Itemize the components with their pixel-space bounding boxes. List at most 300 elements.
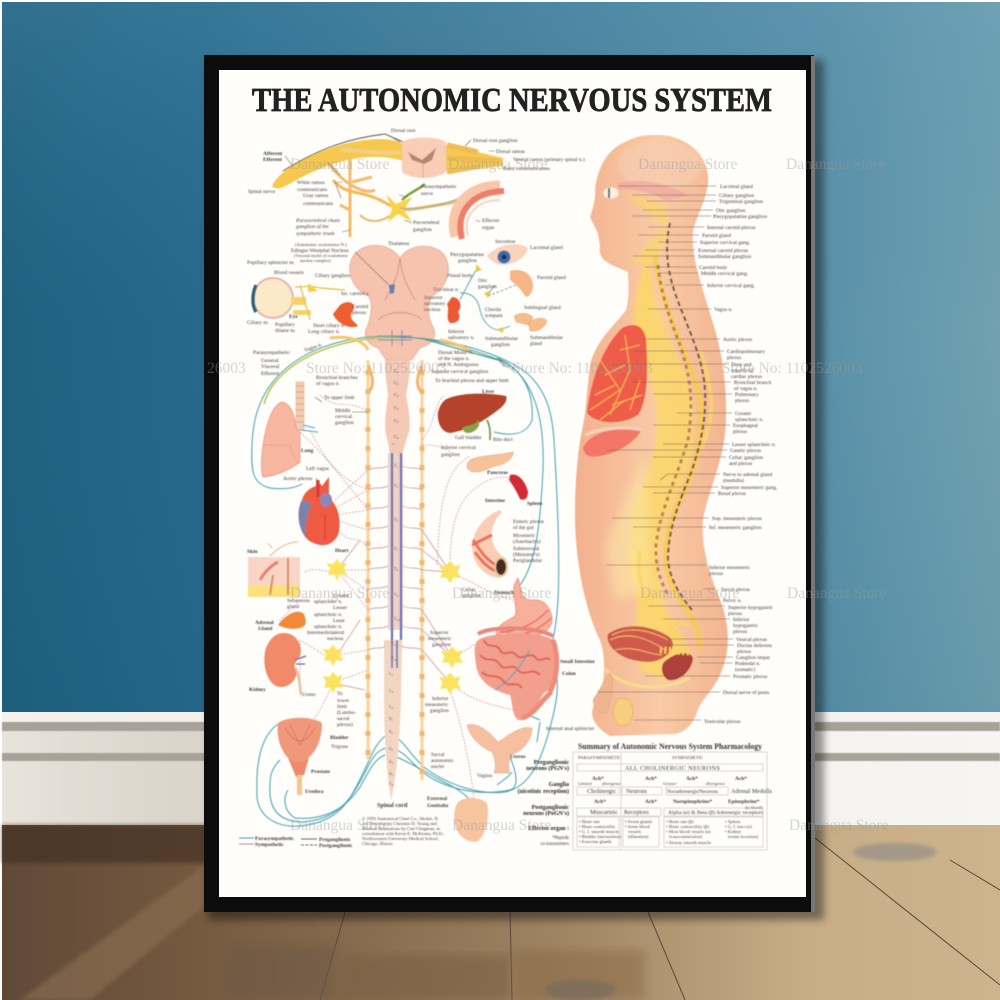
labels: organs: Celiac bbox=[462, 587, 476, 593]
torso labels: Ductus deferens bbox=[737, 642, 772, 649]
store watermarks: Danangua Store bbox=[787, 585, 887, 602]
spinal cord and chains: T₁₂ bbox=[391, 656, 397, 661]
labels: upper diagrams: (Visceral nuclei of oculomotor bbox=[294, 253, 348, 258]
spinal cord and chains: L₁ bbox=[389, 671, 394, 676]
torso labels: Dorsal nerve of penis bbox=[723, 689, 769, 696]
external genitalia bbox=[454, 798, 488, 842]
torso labels: plexus bbox=[733, 629, 747, 635]
labels: upper diagrams: Lacrimal gland bbox=[530, 245, 563, 251]
labels: upper diagrams: Ciliary m. bbox=[247, 320, 269, 326]
torso labels: plexus bbox=[728, 611, 742, 617]
labels: organs: Chicago, Illinois bbox=[362, 841, 393, 847]
labels: organs: mesenteric bbox=[428, 636, 452, 642]
store watermarks bbox=[207, 156, 889, 834]
labels: organs: Vagina bbox=[477, 773, 493, 779]
table row labels: (nicotinic reception) bbox=[518, 788, 569, 795]
labels: organs: To upper limb bbox=[324, 395, 355, 401]
labels: upper diagrams: of the vagus n. bbox=[438, 355, 470, 362]
torso labels: plexus bbox=[709, 571, 723, 577]
labels: organs: Art Direction by Christine D. Young and bbox=[362, 821, 437, 826]
store watermarks: Danangua Store bbox=[786, 156, 886, 173]
spinal cord and chains: C₄ bbox=[394, 405, 399, 410]
table text: • Bladder (micturition) bbox=[579, 834, 621, 839]
table text bbox=[577, 755, 772, 845]
labels: organs: Submucosal bbox=[513, 546, 540, 552]
table text: Neurons bbox=[699, 789, 718, 795]
table text: Greater bbox=[663, 781, 677, 786]
labels: organs: (Meissner's) bbox=[513, 551, 540, 558]
labels: upper diagrams bbox=[247, 128, 585, 384]
labels: upper diagrams: gland bbox=[530, 341, 542, 347]
spinal cord and chains: S₃ bbox=[389, 746, 394, 751]
torso labels: (medulla) bbox=[723, 477, 744, 484]
lung bbox=[262, 382, 318, 477]
labels: organs: Pancreas bbox=[487, 470, 508, 476]
labels: organs: Internal anal sphincter bbox=[546, 726, 594, 732]
table text: Alpha (α) & Beta (β) Adrenergic receptors bbox=[668, 809, 763, 816]
table text: • G. I. smooth muscle bbox=[579, 829, 619, 834]
labels: upper diagrams: Superior bbox=[424, 295, 443, 301]
heart and lung red bbox=[587, 325, 647, 422]
labels: upper diagrams: Dorsal root bbox=[391, 128, 416, 134]
torso labels: Testicular plexus bbox=[704, 719, 741, 725]
labels: organs: Small Intestine bbox=[560, 659, 595, 665]
labels: upper diagrams: Short ciliary n. bbox=[313, 323, 345, 329]
labels: organs: Intestine bbox=[485, 498, 506, 504]
labels: upper diagrams: plexus bbox=[352, 310, 366, 316]
labels: upper diagrams: Sublingual gland bbox=[524, 305, 561, 311]
torso labels: Cardiopulmonary bbox=[727, 349, 765, 355]
labels: upper diagrams: Submandibular bbox=[530, 335, 563, 341]
labels: upper diagrams: Pterygopalatine bbox=[450, 252, 484, 258]
torso labels: Ganglion impar bbox=[736, 655, 770, 661]
labels: upper diagrams: Dorsal Motor N. bbox=[438, 350, 474, 356]
spinal cord and chains: T₁ bbox=[394, 463, 399, 468]
torso labels: Ciliary ganglion bbox=[719, 193, 754, 199]
labels: organs: plexus) bbox=[337, 721, 353, 728]
labels: upper diagrams: Visceral bbox=[261, 364, 280, 370]
labels: organs: autonomic bbox=[431, 758, 454, 764]
labels: organs: Adrenal bbox=[255, 620, 274, 626]
labels: upper diagrams: White ramus bbox=[297, 180, 325, 186]
spine dark bbox=[667, 223, 705, 610]
labels: upper diagrams: Spinal nerve bbox=[248, 189, 276, 195]
labels: organs: Northwestern University Medical School, bbox=[362, 836, 439, 842]
labels: organs: Greater bbox=[333, 593, 349, 599]
store watermarks: Danangua Store bbox=[640, 585, 740, 602]
labels: organs: Genitalia bbox=[427, 803, 449, 809]
labels: organs: Lesser bbox=[333, 605, 347, 611]
labels: upper diagrams: Secretion bbox=[495, 239, 516, 245]
spinal cord and chains: L₃ bbox=[389, 704, 394, 709]
labels: upper diagrams: Pupillary bbox=[275, 322, 295, 328]
labels: organs: lower bbox=[337, 698, 349, 704]
table text: PARASYMPATHETIC bbox=[578, 755, 621, 760]
labels: upper diagrams: Parasympathetic bbox=[421, 184, 457, 190]
labels: upper diagrams: Dorsal ramus bbox=[496, 149, 525, 155]
spinal nerve diagram bbox=[272, 134, 504, 239]
store watermarks: 26003 bbox=[207, 360, 246, 377]
torso labels: Pudendal n. bbox=[735, 661, 760, 667]
adrenal gland bbox=[278, 612, 306, 629]
labels: organs: Sebaceous bbox=[287, 598, 310, 604]
spinal cord and chains: T₁₀ bbox=[394, 616, 400, 621]
labels: upper diagrams: Ciliary ganglion bbox=[315, 273, 350, 279]
store watermarks: Danangua Store bbox=[290, 817, 390, 834]
torso labels: Superior hypogastric bbox=[728, 605, 774, 611]
spinal cord and chains: T₉ bbox=[394, 592, 399, 597]
torso labels: Vesical plexus bbox=[736, 637, 767, 643]
torso labels: Parotid gland bbox=[702, 233, 731, 239]
pelvic parasympathetic nerves bbox=[257, 647, 557, 826]
torso leader lines bbox=[598, 186, 734, 720]
table text: Ach* bbox=[592, 776, 604, 782]
torso labels: Aortic plexus bbox=[723, 337, 752, 343]
labels: upper diagrams: Pineal body bbox=[447, 273, 473, 279]
labels: organs: Superior bbox=[430, 630, 449, 636]
table text: Cholinergic bbox=[587, 788, 616, 795]
spinal cord and chains: S₂ bbox=[389, 729, 394, 734]
torso labels: Sup. mesenteric plexus bbox=[712, 516, 762, 522]
table text: Noradrenergic bbox=[667, 789, 700, 795]
labels: organs: Medical Illustrations by Carl Clingman, in bbox=[362, 826, 441, 832]
spinal cord and chains: C₁ bbox=[394, 368, 399, 373]
table row labels: neurons (PoGN's) bbox=[523, 810, 569, 817]
labels: organs: Colon bbox=[562, 671, 576, 677]
store watermarks: Danangua Store bbox=[452, 585, 552, 602]
torso labels: Inf. mesenteric ganglion bbox=[709, 524, 762, 531]
head nerve yellow bbox=[625, 192, 668, 264]
torso labels: Pterygopalatine ganglion bbox=[713, 214, 767, 220]
labels: upper diagrams: Submandibular bbox=[485, 336, 518, 342]
labels: upper diagrams: nerve bbox=[421, 191, 434, 197]
table text: SYMPATHETIC bbox=[672, 755, 703, 760]
torso labels: Vagus n. bbox=[714, 307, 733, 313]
spinal cord and chains: T₈ bbox=[394, 566, 399, 571]
table text: Limited bbox=[577, 781, 592, 786]
torso labels: Lacrimal gland bbox=[720, 184, 753, 190]
labels: organs: Lung bbox=[301, 448, 314, 454]
store watermarks: Danangua Store bbox=[638, 156, 738, 173]
spinal cord and chains: S₄ bbox=[389, 759, 394, 764]
labels: organs: nucleus bbox=[327, 636, 343, 642]
labels: organs: (Lumbo- bbox=[337, 709, 356, 716]
table text: Adrenal Medulla bbox=[731, 789, 772, 795]
labels: upper diagrams: Vagus n. bbox=[497, 359, 516, 373]
labels: upper diagrams: sympathetic trunk bbox=[296, 231, 335, 237]
labels: upper diagrams: Int. carotid a. bbox=[341, 291, 370, 297]
table text: • Exocrine glands bbox=[579, 839, 612, 844]
spinal cord and chains: L₂ bbox=[389, 688, 394, 693]
labels: organs: External bbox=[427, 796, 448, 802]
pancreas bbox=[467, 452, 513, 472]
labels: organs: ganglion bbox=[441, 452, 460, 458]
table text: ALL CHOLINERGIC NEURONS bbox=[625, 765, 720, 772]
table row labels bbox=[518, 760, 569, 847]
torso labels: (somatic) bbox=[735, 666, 756, 673]
labels: organs: ganglion bbox=[432, 642, 451, 648]
liver bbox=[438, 394, 507, 440]
table text: • Some blood bbox=[625, 824, 651, 829]
torso labels: Trigeminal ganglion bbox=[719, 199, 763, 205]
labels: upper diagrams: communicans bbox=[303, 201, 333, 207]
labels: upper diagrams: dilator m. bbox=[275, 328, 296, 334]
labels: organs: Periglandular bbox=[513, 558, 542, 564]
labels: organs: Middle bbox=[335, 408, 351, 414]
spinal cord and chains: T₅ bbox=[394, 517, 399, 522]
prevertebral ganglion bbox=[386, 194, 412, 222]
labels: upper diagrams: nuclear complex) bbox=[300, 258, 331, 263]
torso labels: Bronchial branch bbox=[734, 380, 772, 386]
labels: upper diagrams: Blood vessels bbox=[274, 270, 304, 276]
table text: Ach* bbox=[594, 799, 606, 805]
labels: organs: Kidney bbox=[249, 687, 266, 693]
labels: upper diagrams: Efferent bbox=[263, 157, 282, 163]
labels: organs: Spinal cord bbox=[377, 802, 408, 809]
labels: organs: ganglion bbox=[462, 593, 481, 599]
labels: upper diagrams: To brachial plexus and upper limb bbox=[435, 378, 509, 384]
table text: Ach* bbox=[735, 776, 747, 782]
table text: divergence bbox=[706, 781, 725, 786]
table text: Ach* bbox=[645, 776, 657, 782]
labels: upper diagrams: salivatory n. bbox=[448, 335, 475, 341]
torso labels: Superior cervical gang. bbox=[700, 240, 750, 246]
torso labels: Carotid body bbox=[699, 265, 728, 271]
table text: • Most blood vessels (α) bbox=[666, 829, 711, 834]
title: THE AUTONOMIC NERVOUS SYSTEM bbox=[252, 82, 772, 119]
spinal cord and chains: S₁ bbox=[389, 716, 394, 721]
labels: upper diagrams: Thalamus bbox=[388, 241, 409, 247]
labels: upper diagrams: nucleus bbox=[424, 307, 440, 313]
labels: organs: (Auerbach's) bbox=[513, 538, 541, 545]
labels: organs: Stomach bbox=[494, 590, 514, 596]
labels: organs: Uterus bbox=[510, 754, 526, 760]
labels: organs: Least bbox=[333, 618, 345, 624]
labels: upper diagrams: Afferent bbox=[263, 151, 283, 157]
torso labels: Pelvic n. bbox=[723, 598, 742, 604]
intestine wall bbox=[472, 510, 507, 578]
spinal cord and chains: C₀ bbox=[389, 781, 394, 786]
store watermarks: Danangua Store bbox=[290, 585, 390, 602]
table row labels: neurons (PGN's) bbox=[526, 765, 569, 772]
table row labels: Postganglionic bbox=[532, 805, 569, 811]
table text: • Airway smooth muscle bbox=[666, 840, 711, 845]
labels: organs: Left vagus bbox=[306, 465, 329, 472]
labels: upper diagrams: Edinger-Westphal Nucleus bbox=[291, 248, 349, 254]
torso labels: cardiac plexus bbox=[731, 374, 762, 380]
vagus nerves bbox=[252, 336, 559, 660]
spinal cord and chains: C₅ bbox=[394, 418, 399, 423]
eye bbox=[253, 278, 345, 320]
torso anatomical figure bbox=[575, 135, 728, 736]
table text: Ach* bbox=[686, 776, 698, 782]
labels: organs bbox=[247, 375, 595, 847]
table text: • Heart rate (β) bbox=[666, 819, 694, 824]
labels: organs: gland bbox=[287, 604, 299, 610]
table text: Receptors bbox=[624, 809, 649, 816]
labels: organs: nuclei bbox=[431, 764, 445, 770]
torso labels: Nerve to adrenal gland bbox=[723, 472, 773, 478]
torso labels: Lesser splanchnic n. bbox=[732, 442, 776, 448]
legend: Sympathetic bbox=[255, 842, 284, 848]
table text: Muscarinic bbox=[590, 809, 618, 816]
labels: organs: Heart bbox=[335, 548, 349, 554]
torso labels: Gastric plexus bbox=[730, 448, 761, 454]
skin bbox=[248, 542, 300, 597]
torso labels: Middle cervical gang. bbox=[701, 271, 748, 277]
table text: • Heart rate bbox=[579, 819, 600, 824]
poster frame bbox=[204, 55, 824, 920]
labels: upper diagrams: Long ciliary n. bbox=[308, 329, 340, 335]
labels: organs: Sacral bbox=[431, 752, 445, 758]
kidney bbox=[264, 633, 306, 695]
legend: Preganglionic bbox=[319, 837, 351, 843]
torso labels: hypogastric bbox=[733, 623, 759, 629]
labels: upper diagrams: Rami communicantes bbox=[503, 166, 550, 172]
labels: organs: splanchnic n. bbox=[314, 612, 342, 618]
spinal cord and chains: C₃ bbox=[394, 392, 399, 397]
torso labels: Renal plexus bbox=[718, 491, 746, 497]
labels: upper diagrams: Pupillary sphincter m. bbox=[247, 260, 295, 266]
torso labels: splanchnic n. bbox=[735, 417, 763, 423]
store watermarks: Danangua Store bbox=[789, 817, 889, 834]
labels: organs: Gall bladder bbox=[455, 435, 482, 441]
intestines bbox=[475, 628, 557, 720]
carotid plexus left bbox=[333, 302, 358, 327]
table text: Norepinephrine* bbox=[673, 799, 712, 805]
table text: • Heart contractility bbox=[579, 824, 616, 829]
torso labels: Celiac ganglion bbox=[729, 455, 763, 461]
labels: organs: ganglion bbox=[335, 420, 354, 426]
labels: organs: Bronchial branches bbox=[316, 375, 358, 381]
labels: upper diagrams: Gray ramus bbox=[303, 193, 328, 199]
table text: vessels bbox=[628, 829, 641, 834]
table text: divergence bbox=[602, 781, 621, 786]
labels: organs: Inferior bbox=[432, 695, 449, 702]
labels: upper diagrams: salivatory bbox=[424, 301, 446, 307]
store watermarks: Danangua Store bbox=[448, 156, 548, 173]
spinal cord cross-section bbox=[402, 138, 446, 178]
labels: organs: Intermediolateral bbox=[307, 630, 345, 636]
labels: organs: Myenteric bbox=[513, 533, 536, 539]
table text: Epinephrine* bbox=[728, 799, 760, 805]
spinal cord and chains bbox=[368, 360, 422, 800]
store watermarks: Danangua Store bbox=[452, 817, 552, 834]
labels: upper diagrams: Effector bbox=[482, 217, 500, 224]
torso labels: Inferior cervical gang. bbox=[707, 282, 755, 289]
spinal cord and chains: T₃ bbox=[394, 483, 399, 488]
labels: upper diagrams: tympani bbox=[485, 313, 503, 319]
labels: upper diagrams: Carotid bbox=[352, 304, 368, 310]
spinal cord and chains: T₇ bbox=[394, 546, 399, 551]
table text: Ach* bbox=[645, 799, 657, 805]
table title: Summary of Autonomic Nervous System Pharmacology bbox=[578, 741, 763, 751]
labels: organs: Urethra bbox=[305, 789, 324, 795]
pharmacology table bbox=[518, 741, 772, 850]
table text: • Sweat glands bbox=[625, 819, 652, 824]
table text: • G. I. tract (α) bbox=[725, 824, 752, 829]
torso labels: of vagus n. bbox=[734, 385, 758, 392]
table text: • Heart contractility (β) bbox=[666, 824, 709, 829]
labels: upper diagrams: General bbox=[261, 358, 279, 364]
labels: upper diagrams: Efferent bbox=[261, 370, 280, 377]
brain and brainstem bbox=[350, 245, 448, 360]
ganglia bbox=[322, 559, 463, 694]
torso labels: and plexus bbox=[729, 461, 752, 467]
torso labels: Deep and bbox=[731, 362, 752, 368]
labels: upper diagrams: Trochlear n. bbox=[433, 287, 459, 293]
sympathetic trunks bbox=[368, 360, 422, 780]
legend bbox=[239, 836, 353, 849]
sympathetic chain bbox=[330, 157, 375, 237]
labels: upper diagrams: ganglion bbox=[458, 258, 477, 264]
carotid plexus right bbox=[447, 297, 460, 323]
torso labels: Esophageal bbox=[733, 423, 758, 429]
legend: Parasympathetic bbox=[255, 836, 295, 842]
torso labels: Prostatic plexus bbox=[733, 674, 767, 680]
table boxes bbox=[573, 752, 767, 850]
eye of torso bbox=[603, 187, 619, 199]
labels: upper diagrams: Parasympathetic bbox=[253, 350, 290, 356]
legend: Postganglionic bbox=[319, 843, 353, 849]
store watermarks: Store No: 1102526003 bbox=[306, 360, 447, 377]
labels: upper diagrams: Vagus n. bbox=[304, 342, 323, 354]
labels: organs: mesenteric bbox=[425, 702, 449, 708]
labels: organs: © 1993 Anatomical Chart Co., Skokie, IL bbox=[362, 816, 439, 822]
spinal cord and chains: C₂ bbox=[394, 380, 399, 385]
labels: organs: limb bbox=[337, 704, 347, 710]
torso labels: plexus bbox=[735, 398, 749, 404]
labels: organs: splanchnic n. bbox=[314, 624, 342, 630]
labels: organs: consultation with Kevin E. McKenna, Ph.D., bbox=[362, 831, 444, 837]
table row labels: Ganglia bbox=[549, 782, 569, 788]
torso labels: Greater bbox=[735, 411, 751, 417]
torso labels: plexus bbox=[727, 355, 741, 361]
labels: upper diagrams: Chorda bbox=[485, 307, 501, 313]
table text: (dilatation) bbox=[628, 834, 649, 839]
torso labels: Otic ganglion bbox=[716, 208, 746, 214]
labels: organs: Inferior cervical bbox=[441, 444, 476, 451]
labels: organs: ganglion bbox=[430, 708, 449, 714]
store watermarks: Store No: 1102526003 bbox=[722, 360, 863, 377]
table text: (to blood) bbox=[745, 805, 763, 810]
labels: upper diagrams: Inferior bbox=[448, 328, 465, 335]
labels: upper diagrams: and N. Ambiguous bbox=[438, 362, 479, 368]
stomach bbox=[496, 578, 552, 637]
labels: organs: Aortic plexus bbox=[283, 476, 312, 482]
torso labels: plexus bbox=[737, 649, 751, 655]
bladder and prostate bbox=[278, 718, 322, 795]
table text: (renin secretion) bbox=[728, 834, 759, 839]
labels: organs: cervical bbox=[335, 414, 353, 420]
torso labels: superficial bbox=[731, 367, 754, 374]
labels: organs: Ureter bbox=[302, 692, 316, 698]
table text: (vasoconstriction) bbox=[669, 834, 703, 839]
labels: organs: Enteric plexus bbox=[513, 519, 544, 525]
labels: organs: Bile duct bbox=[493, 437, 513, 443]
labels: organs: Skin bbox=[247, 549, 258, 555]
torso labels: Pulmonary bbox=[735, 392, 759, 398]
spinal cord and chains: T₁₁ bbox=[391, 641, 397, 646]
labels: upper diagrams: (Autonomic oculomotor N.) bbox=[295, 242, 347, 247]
labels: upper diagrams: Paravertebral chain bbox=[295, 218, 340, 224]
labels: upper diagrams: Superior cervical ganglion bbox=[431, 369, 488, 375]
torso labels: Submandibular ganglion bbox=[698, 254, 751, 260]
labels: upper diagrams: Dorsal root ganglion bbox=[473, 138, 518, 144]
torso labels: Superior mesenteric gang. bbox=[721, 485, 777, 491]
table row labels: *Peptide bbox=[552, 836, 569, 841]
labels: organs: of vagus n. bbox=[316, 380, 340, 387]
